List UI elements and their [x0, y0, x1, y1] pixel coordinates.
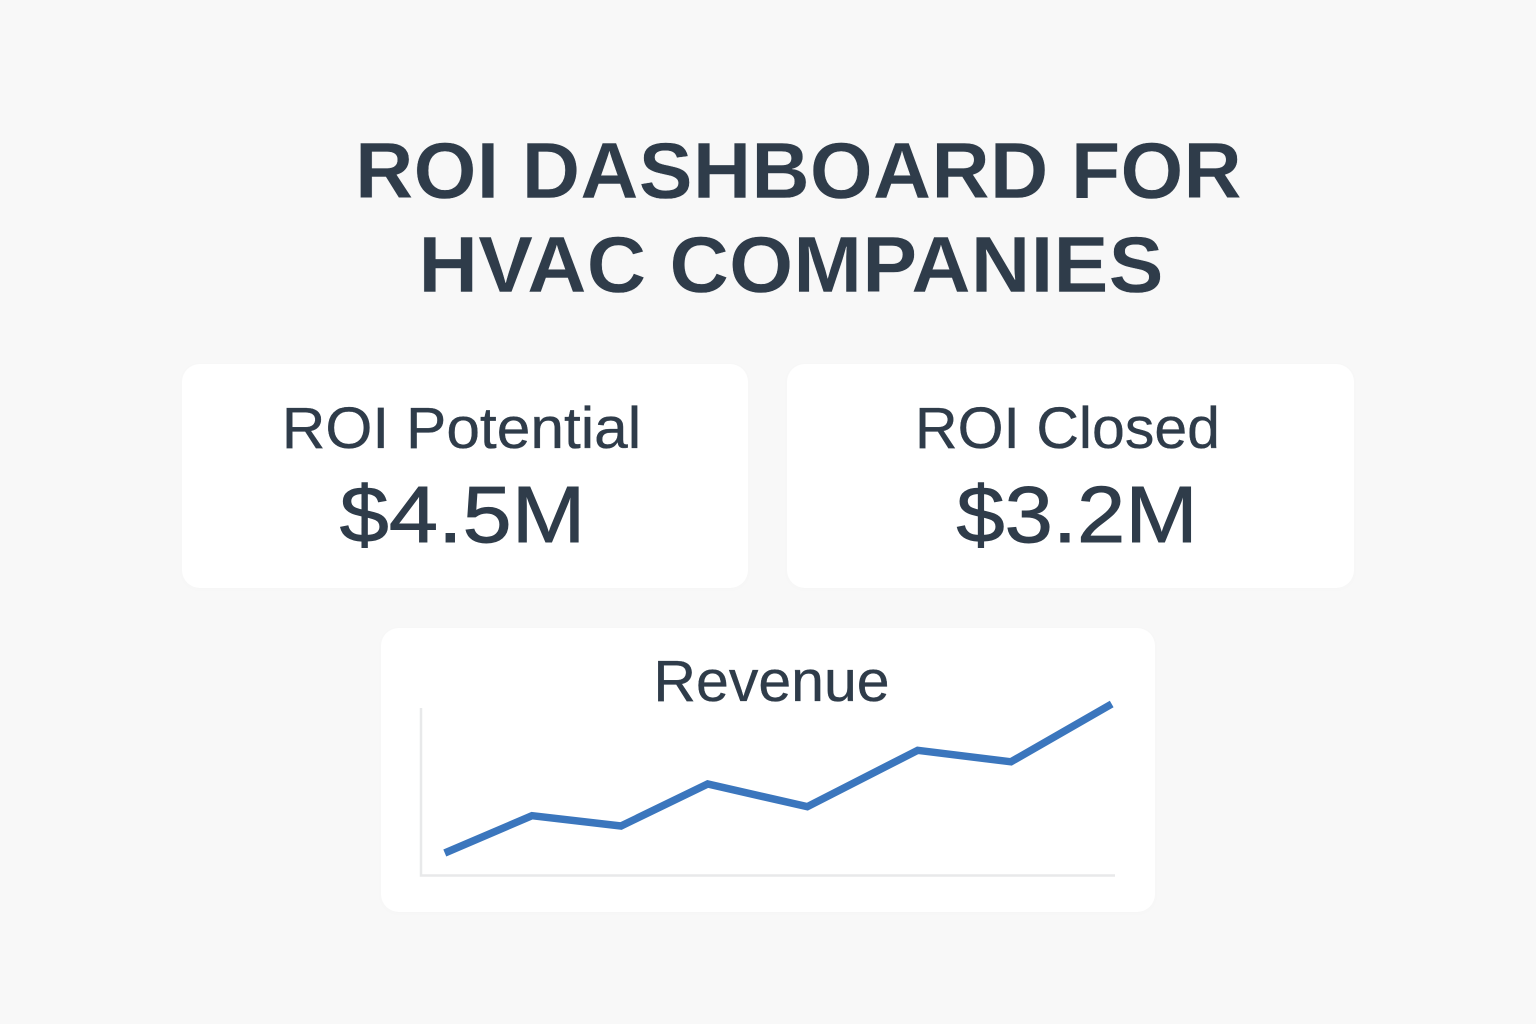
panel: ROI Potential	[182, 364, 748, 588]
value: $3.2M: $3.2M	[956, 470, 1198, 559]
panel: ROI Closed	[787, 364, 1354, 588]
value: $4.5M: $4.5M	[340, 470, 585, 559]
revenue line	[445, 704, 1112, 853]
label: ROI Closed: ROI Closed	[915, 396, 1220, 461]
chart axes	[421, 708, 1115, 876]
label: ROI Potential: ROI Potential	[282, 396, 641, 461]
panel: Revenue	[381, 628, 1155, 912]
line chart: revenue	[420, 700, 1115, 877]
title line 1: ROI DASHBOARD FOR	[355, 126, 1242, 215]
title	[355, 126, 1242, 309]
label: Revenue: Revenue	[653, 649, 890, 714]
title line 2: HVAC COMPANIES	[418, 220, 1164, 309]
